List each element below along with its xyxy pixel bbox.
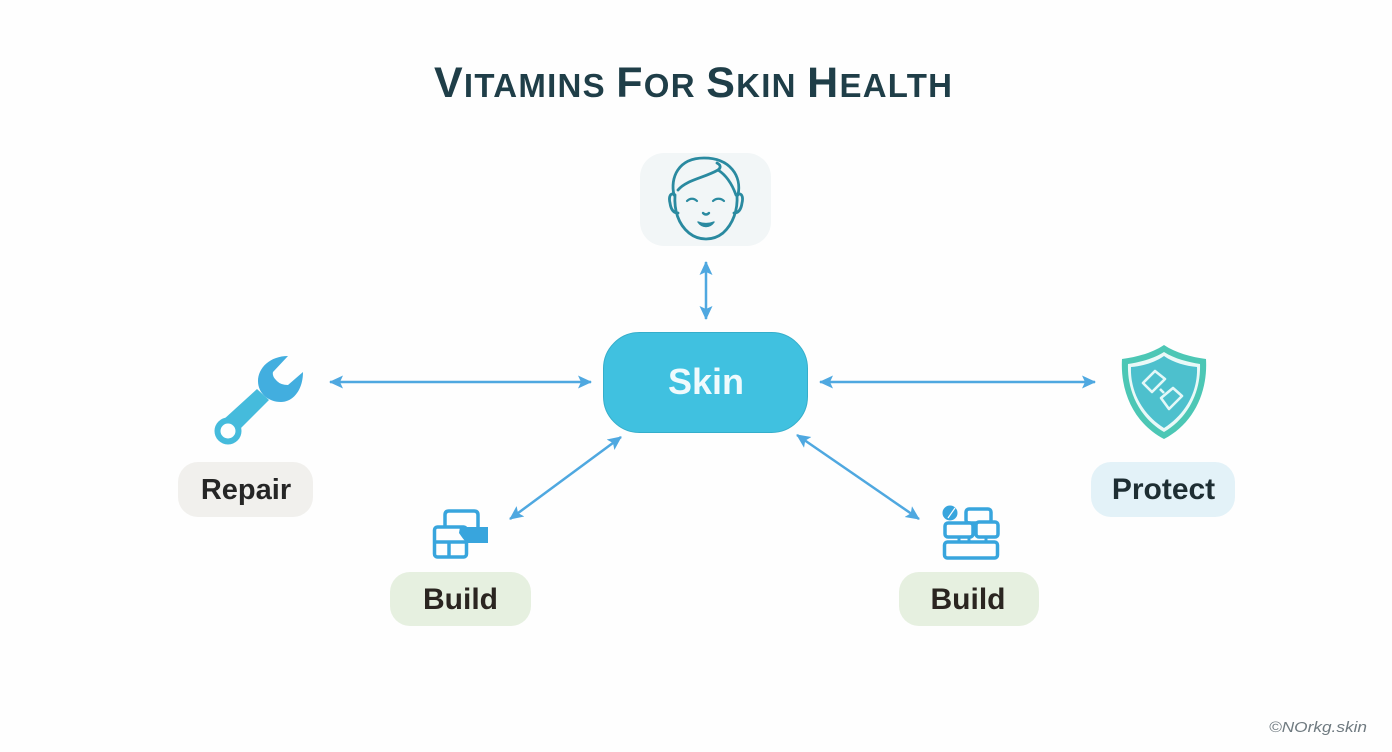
label: Build left: [390, 572, 531, 626]
arrow: build left to skin: [510, 437, 621, 519]
label: Protect: Protect: [1112, 473, 1215, 506]
arrow: skin to protect: [820, 381, 1095, 383]
title: VITAMINS FOR SKIN HEALTH: [434, 59, 952, 107]
label: Repair: [178, 462, 313, 517]
right build group: [899, 506, 1039, 626]
arrow: repair to skin: [330, 381, 591, 383]
icon: wrench: [218, 356, 303, 442]
label: Repair: Repair: [201, 474, 291, 506]
central node: Skin: [604, 332, 808, 432]
label: Build left: Build: [423, 583, 498, 616]
icon: face: [669, 158, 743, 239]
protect group: [1091, 345, 1235, 517]
left build group: [390, 511, 531, 626]
icon: shield: [1122, 345, 1206, 439]
icon: bricks right: [942, 506, 998, 558]
central node: Skin: Skin: [668, 361, 744, 402]
icon: bricks left: [434, 511, 488, 557]
repair group: [178, 356, 313, 517]
label: Protect: [1091, 462, 1235, 517]
face icon tile: [640, 153, 771, 246]
arrow: build right to skin: [797, 435, 919, 519]
arrow: face to skin: [705, 262, 707, 319]
watermark: ©NOrkg.skin: [1269, 719, 1367, 736]
label: Build right: Build: [930, 583, 1006, 616]
